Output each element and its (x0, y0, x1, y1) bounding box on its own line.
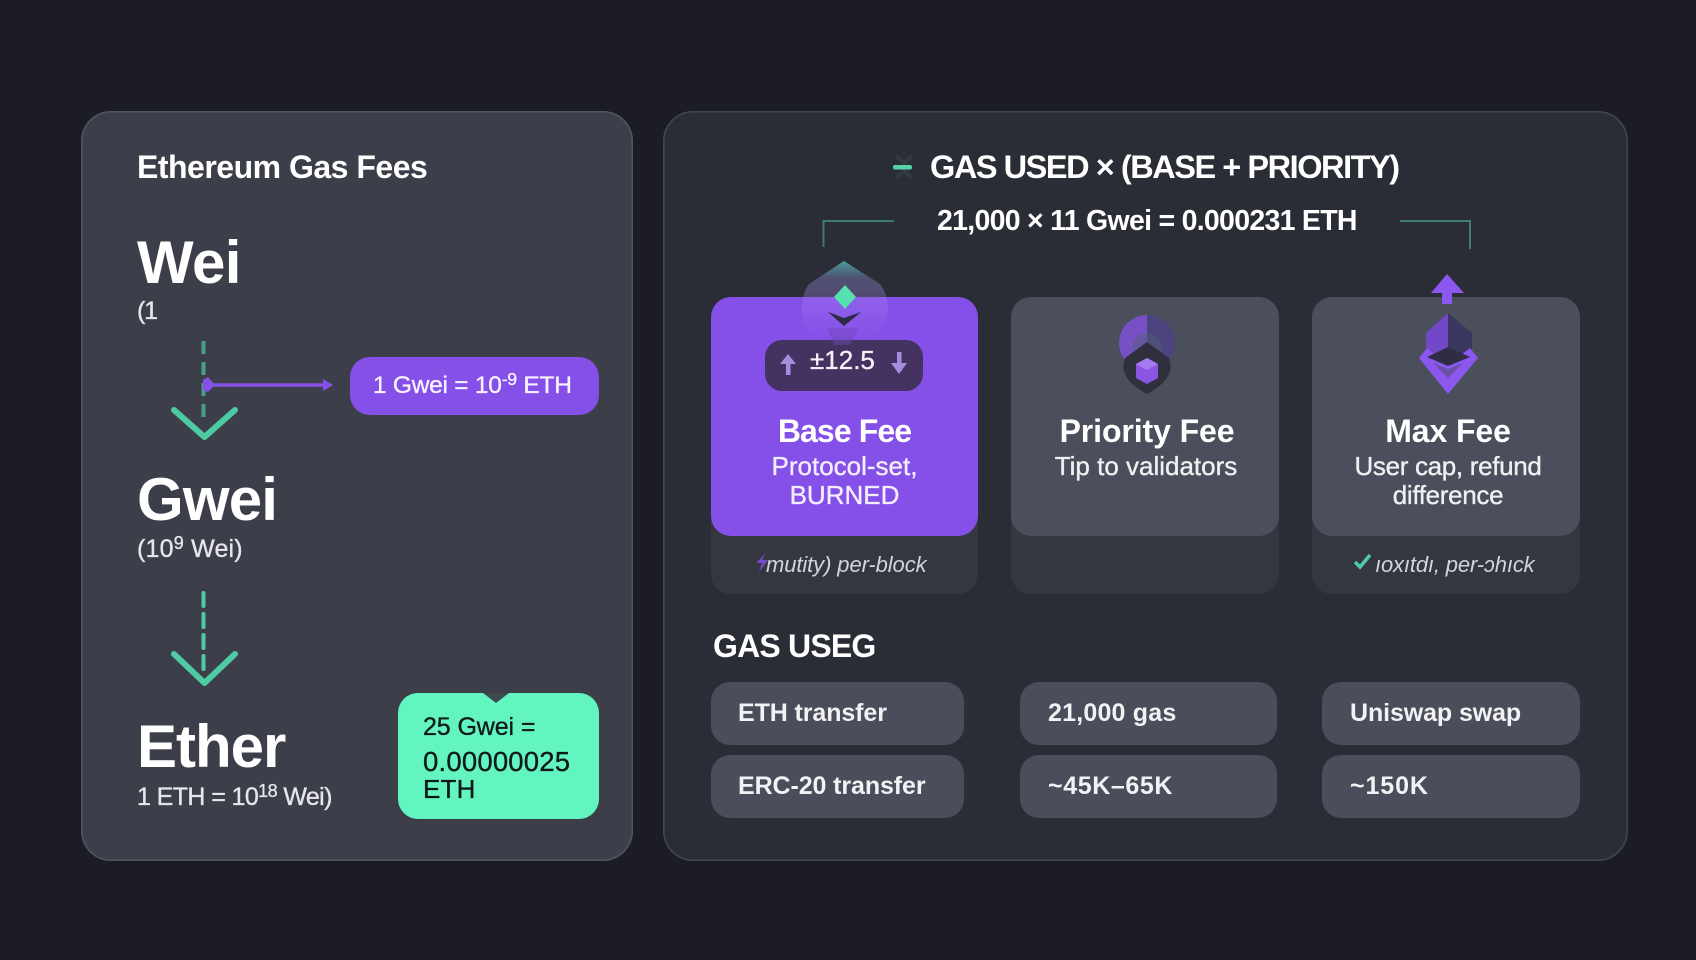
card: max fee (1312, 297, 1580, 536)
label: Uniswap swap (1350, 699, 1521, 727)
row 1: ETH transfer (711, 682, 964, 745)
description: Tip to validators (1055, 451, 1237, 481)
table: gas usage (711, 682, 1580, 818)
callout: gas price example (398, 693, 599, 819)
variance pill (765, 340, 923, 391)
callout value: ETH (423, 774, 476, 804)
icon: check (1354, 554, 1372, 570)
panel: fee breakdown (663, 111, 1628, 861)
row 1: Uniswap swap (1322, 682, 1580, 745)
bracket: right (1400, 220, 1471, 249)
arrow: Wei to Gwei callout (203, 377, 333, 392)
icon: up arrow (780, 354, 796, 375)
worked example: 21,000 × 11 Gwei = 0.000231 ETH (937, 205, 1357, 237)
value: ~45K–65K (1048, 772, 1173, 800)
label: ERC-20 transfer (738, 772, 925, 800)
row 2: ERC-20 value (1020, 755, 1277, 818)
row 2: Uniswap value (1322, 755, 1580, 818)
callout notch (483, 693, 509, 703)
footer: base fee (711, 500, 978, 594)
description: BURNED (790, 480, 899, 510)
icon: max fee gem and arrow (1419, 274, 1478, 394)
icon: down arrow (891, 352, 907, 374)
heading: gas usage: GAS USEG (713, 628, 876, 664)
callout text: 25 Gwei = (423, 713, 535, 741)
value: 21,000 gas (1048, 699, 1176, 727)
unit note: Ether: 1 ETH = 1018 Wei) (137, 781, 332, 811)
arrow: Gwei to Ether (171, 591, 238, 686)
bracket: left (822, 220, 894, 247)
unit: Ether: Ether (137, 713, 285, 780)
icon: base fee gem (802, 261, 888, 345)
unit: Wei: Wei (137, 229, 241, 296)
icon: bolt mark (756, 553, 768, 572)
callout value (423, 746, 570, 804)
heading: Ethereum Gas Fees (137, 149, 427, 185)
unit note: Gwei: (109 Wei) (137, 533, 243, 563)
row 2: ERC-20 transfer (711, 755, 964, 818)
footer: max fee (1312, 500, 1580, 594)
card: priority fee (1011, 297, 1279, 536)
icon: formula mark (893, 154, 913, 180)
title: Base Fee (778, 413, 911, 449)
description (772, 451, 917, 510)
description: Protocol-set, (772, 451, 917, 481)
footer text: mutity) per-block (766, 552, 926, 577)
callout value: 0.00000025 (423, 746, 570, 777)
row 1: ETH transfer value (1020, 682, 1277, 745)
unit note: Wei: (1 (137, 297, 157, 325)
footer text: ıoxıtdı, per-ɔhıck (1375, 552, 1535, 577)
description: User cap, refund (1354, 451, 1542, 481)
icon: priority coin (1119, 315, 1175, 394)
callout text: 1 Gwei = 10-9 ETH (373, 369, 572, 399)
formula: GAS USED × (BASE + PRIORITY) (930, 149, 1399, 185)
unit: Gwei: Gwei (137, 466, 277, 533)
callout: Gwei to ETH (350, 357, 599, 415)
title: Max Fee (1385, 413, 1511, 449)
footer: priority fee (1011, 500, 1279, 594)
panel: units (81, 111, 633, 861)
label: ETH transfer (738, 699, 887, 727)
title: Priority Fee (1060, 413, 1234, 449)
arrow: Wei to Gwei (171, 341, 238, 440)
value: ~150K (1350, 772, 1429, 800)
card: base fee (711, 297, 978, 536)
pill value: ±12.5 (810, 345, 875, 375)
description (1354, 451, 1542, 510)
description: difference (1393, 480, 1503, 510)
